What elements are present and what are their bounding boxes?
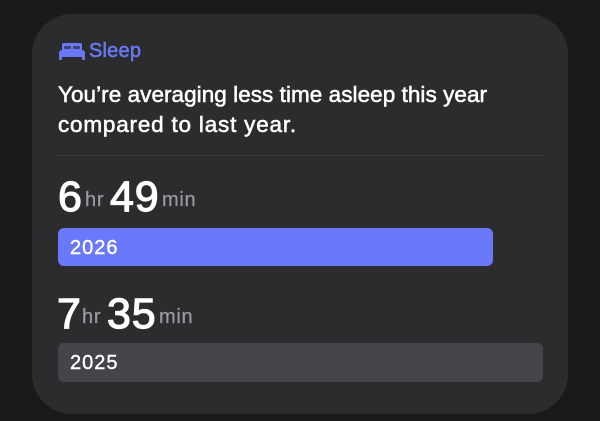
text block: summary: You’re averaging less time asleep this year: [58, 82, 487, 107]
heading: Sleep: Sleep: [89, 40, 141, 62]
value: 2025 duration: 7: [57, 290, 82, 338]
bar label: 2025: 2025: [70, 352, 118, 374]
value: 2026 duration: min: [162, 189, 196, 211]
value: 2025 duration: [57, 290, 193, 338]
text block: summary: compared to last year.: [58, 112, 297, 137]
value: 2026 duration: 49: [110, 173, 159, 221]
value: 2026 duration: hr: [85, 189, 104, 211]
bar label: 2026: 2026: [70, 237, 118, 259]
bar: 2025: [58, 343, 543, 382]
value: 2025 duration: hr: [82, 306, 101, 328]
icon: bed: [59, 43, 85, 60]
value: 2026 duration: [58, 173, 196, 221]
bar: 2026: [58, 228, 493, 266]
divider: [58, 155, 545, 156]
text block: summary: [58, 82, 487, 137]
value: 2025 duration: min: [159, 306, 193, 328]
value: 2025 duration: 35: [107, 290, 156, 338]
value: 2026 duration: 6: [58, 173, 83, 221]
